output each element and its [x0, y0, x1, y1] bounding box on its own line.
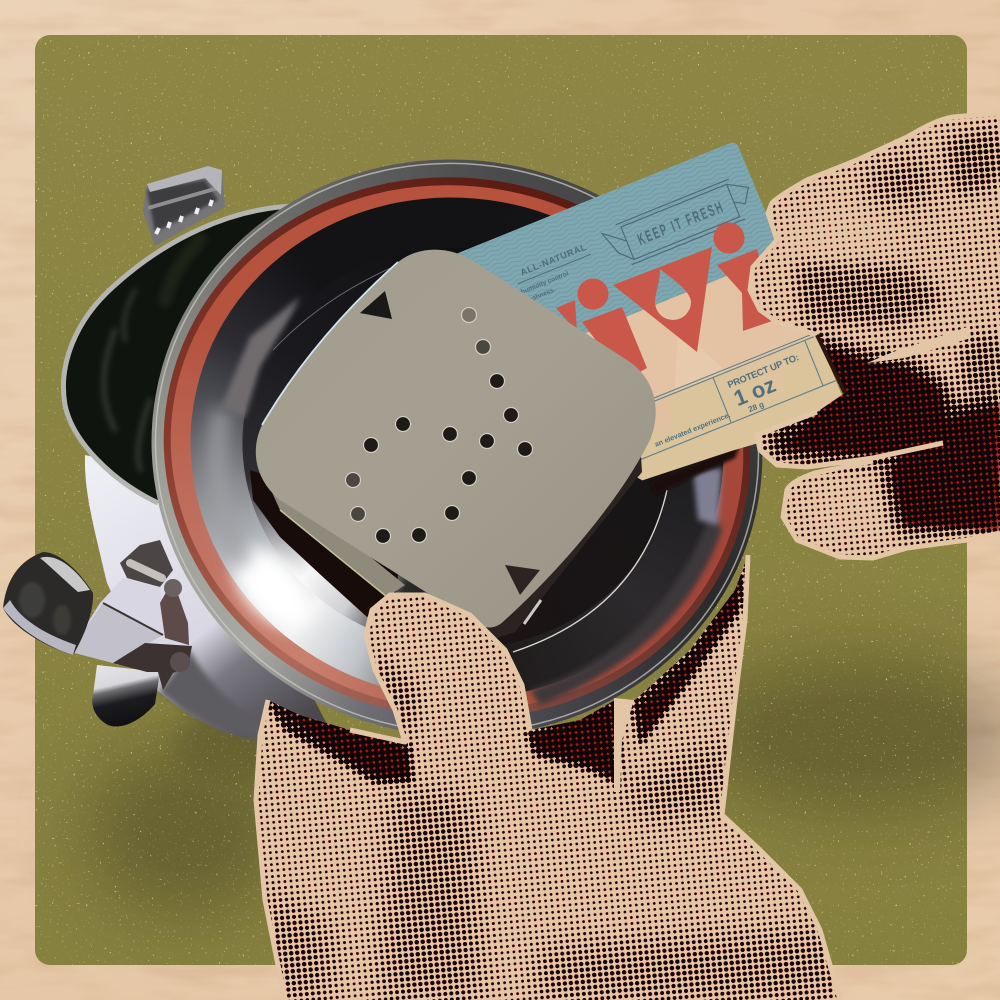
lid outer metal rim	[106, 111, 808, 785]
tin: metal humidity pack	[256, 250, 656, 640]
red under shadow	[785, 345, 1000, 530]
tin lower-left side face	[262, 470, 405, 597]
tin holes	[346, 308, 532, 544]
red under shadow	[275, 575, 742, 778]
card rule lines	[641, 335, 836, 460]
right hand halftone	[754, 116, 1000, 556]
pot: open stainless jar behind the lid	[63, 166, 330, 741]
pot body lower shading	[160, 650, 270, 741]
right hand cut-out edge	[750, 113, 1000, 558]
lavender reflection	[693, 468, 722, 525]
latch vertical arm	[160, 580, 189, 645]
latch dark arm	[113, 643, 192, 690]
upper left thin arc	[273, 257, 417, 350]
plate facet	[75, 603, 163, 663]
latch pin	[130, 563, 162, 578]
lower right dull band	[530, 510, 722, 705]
bottom hand cut-out edge	[256, 555, 840, 1000]
card: humidity pack label	[457, 142, 842, 480]
banner: keep it fresh: KEEP IT FRESH	[635, 199, 727, 249]
hand: bottom halftone hand gripping lid	[240, 540, 860, 1000]
tin body	[256, 250, 656, 628]
finger gap	[614, 698, 634, 792]
lower right thin arc	[513, 490, 667, 652]
interior reflections	[104, 240, 200, 470]
lid reflections	[217, 257, 740, 705]
bright hot spot	[219, 534, 325, 642]
latch plate bright	[75, 578, 166, 663]
tin side shadow	[478, 440, 642, 640]
tin lower right glint	[524, 600, 541, 624]
card shadow on hand	[817, 335, 845, 393]
gasket dark band	[121, 131, 793, 765]
logo: red letters on card	[556, 222, 775, 376]
upper left grey reflection	[220, 297, 300, 417]
all-natural rule	[518, 254, 591, 284]
triangle vent top	[360, 291, 392, 319]
shadow wedge under tin	[250, 470, 400, 617]
text: protect up to: PROTECT UP TO:	[726, 352, 801, 391]
chrome shoulder	[151, 155, 763, 741]
lid: stainless lid with red gasket	[106, 111, 808, 785]
pot latch: knob, arm and tab	[3, 540, 192, 726]
pot interior	[63, 206, 300, 503]
text: 1 oz: 1 oz	[730, 372, 779, 411]
banner: keep it fresh	[600, 178, 749, 266]
card shadow on lid	[650, 445, 740, 495]
card kraft lower panel	[637, 336, 842, 480]
latch tab	[92, 665, 160, 726]
text: humidity control: humidity control	[520, 270, 570, 296]
latch top mechanism	[120, 540, 173, 587]
hand: right halftone hand holding card	[748, 113, 1000, 560]
bottom hand paper	[256, 555, 840, 1000]
bottom hand halftone	[258, 562, 837, 1000]
tin blue edge glint	[262, 262, 398, 425]
pot body	[85, 455, 330, 738]
text: freshness: freshness.	[524, 286, 557, 305]
pot top clasp	[143, 166, 225, 246]
card tan middle panel	[585, 276, 813, 400]
text: 28 g: 28 g	[747, 400, 765, 414]
text: all-natural: ALL-NATURAL	[519, 242, 588, 277]
knob highlights	[3, 557, 90, 655]
finger slit	[867, 326, 971, 363]
knob	[3, 552, 93, 655]
gasket red band	[129, 140, 785, 756]
tin side glint line	[280, 510, 387, 597]
card watermark triangles	[652, 316, 726, 392]
inner dish	[211, 214, 703, 682]
screws	[164, 579, 190, 672]
rim highlight line	[110, 116, 804, 780]
pot rim	[63, 206, 295, 503]
text: elevated experience: an elevated experience.	[653, 410, 731, 449]
silver streak left side	[217, 410, 245, 565]
drop shadows on panel	[85, 657, 1000, 915]
card blue upper panel	[457, 142, 774, 333]
triangle vent bottom	[505, 565, 540, 595]
right hand paper	[750, 113, 1000, 558]
